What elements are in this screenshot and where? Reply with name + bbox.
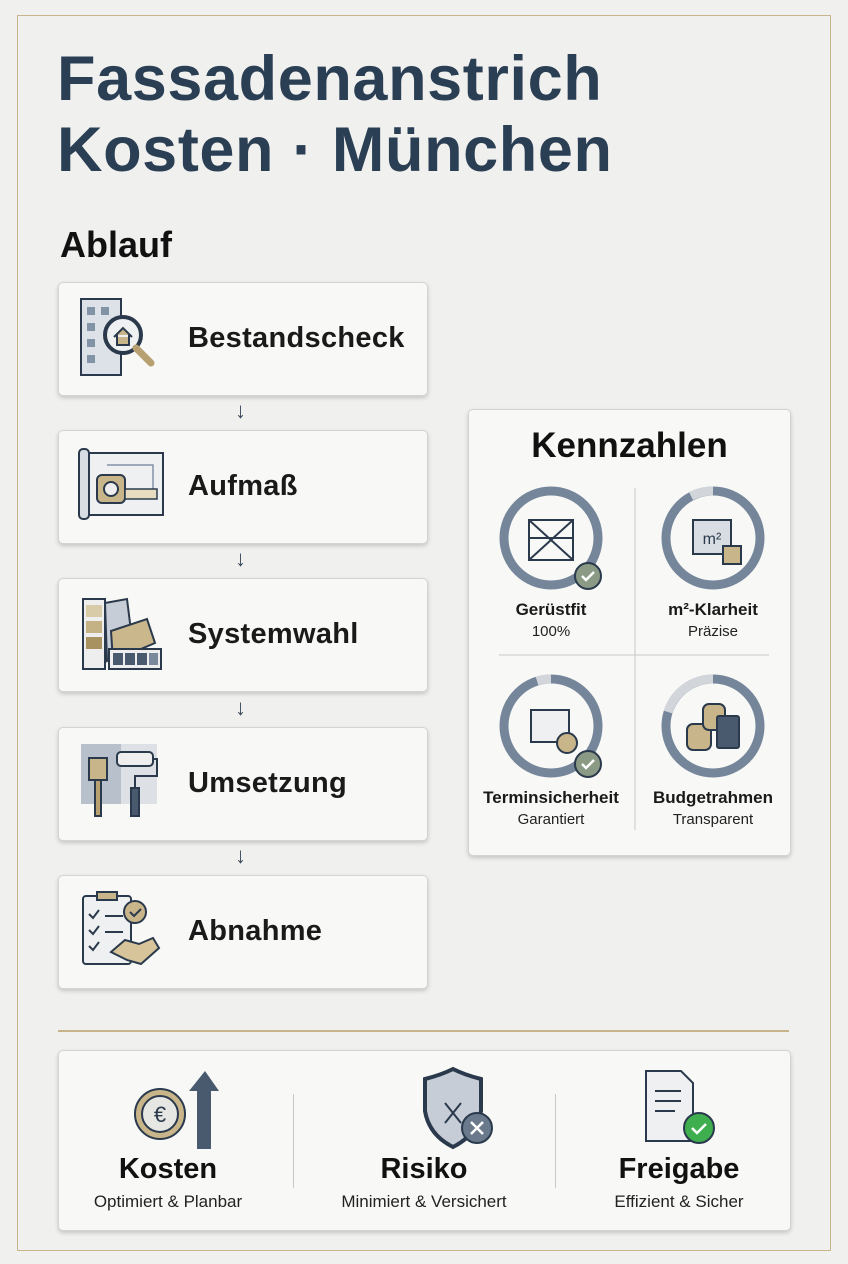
- icon: building magnifier: [80, 298, 154, 376]
- icon: euro arrow: [189, 1071, 219, 1149]
- heading: Kennzahlen: Kennzahlen: [531, 426, 728, 465]
- icon: scaffold: [529, 520, 573, 560]
- summary: Freigabe: [614, 1153, 744, 1211]
- icon: brush roller: [81, 744, 158, 817]
- summary: Kosten: Kosten: [119, 1153, 217, 1185]
- panel: summary: [58, 1050, 791, 1231]
- step: Aufmaß: Aufmaß: [188, 470, 298, 502]
- metric: Gerüstfit: 100%: [532, 623, 570, 640]
- icon: blueprint tape: [78, 448, 164, 520]
- summary: Kosten: [94, 1153, 242, 1211]
- metric: Terminsicherheit: Garantiert: [518, 811, 584, 828]
- icon: coins calculator: [687, 704, 725, 750]
- title: Kosten · München: [57, 115, 613, 185]
- metric: m²-Klarheit: m²-Klarheit: [668, 600, 758, 619]
- metric: Terminsicherheit: Terminsicherheit: [483, 788, 619, 807]
- step: Bestandscheck: [58, 282, 428, 396]
- metric: m²-Klarheit: [668, 600, 758, 640]
- step: Umsetzung: [58, 727, 428, 841]
- metric: m²-Klarheit: Präzise: [688, 623, 738, 640]
- summary: Risiko: Minimiert & Versichert: [341, 1192, 507, 1211]
- arrow: ↓: [235, 398, 246, 423]
- icon: colour fan: [82, 598, 162, 670]
- icons row: €: [154, 1102, 166, 1127]
- panel: Kennzahlen: [468, 409, 791, 856]
- icon: calendar: [531, 710, 569, 742]
- metric: Budgetrahmen: Transparent: [673, 811, 753, 828]
- summary: Freigabe: Freigabe: [619, 1153, 739, 1185]
- summary: Kosten: Optimiert & Planbar: [94, 1192, 242, 1211]
- step: Systemwahl: Systemwahl: [188, 618, 359, 650]
- icon: shield: [425, 1069, 481, 1147]
- step: Aufmaß: [58, 430, 428, 544]
- step: Abnahme: [58, 875, 428, 989]
- rings chart: [499, 486, 769, 830]
- metric: Budgetrahmen: Budgetrahmen: [653, 788, 773, 807]
- icon: document check: [646, 1071, 693, 1141]
- arrow: ↓: [235, 695, 246, 720]
- metric: Gerüstfit: [516, 600, 586, 640]
- summary: Freigabe: Effizient & Sicher: [614, 1192, 744, 1211]
- rings chart: m²: [703, 531, 722, 548]
- icon: clipboard handshake: [82, 891, 160, 966]
- step: Umsetzung: Umsetzung: [188, 767, 347, 799]
- title: Fassadenanstrich: [57, 44, 602, 114]
- step: Abnahme: Abnahme: [188, 915, 322, 947]
- title: [57, 44, 613, 185]
- icon: m2: [693, 520, 731, 554]
- step: Systemwahl: [58, 578, 428, 692]
- heading: Ablauf: Ablauf: [60, 224, 172, 265]
- summary: Risiko: Risiko: [380, 1153, 468, 1185]
- step: Bestandscheck: Bestandscheck: [188, 322, 405, 354]
- arrow: ↓: [235, 546, 246, 571]
- icons row: [134, 1066, 715, 1150]
- arrow: ↓: [235, 843, 246, 868]
- metric: Gerüstfit: Gerüstfit: [516, 600, 586, 619]
- summary: Risiko: [341, 1153, 507, 1211]
- metric: Terminsicherheit: [483, 788, 619, 828]
- metric: Budgetrahmen: [653, 788, 773, 828]
